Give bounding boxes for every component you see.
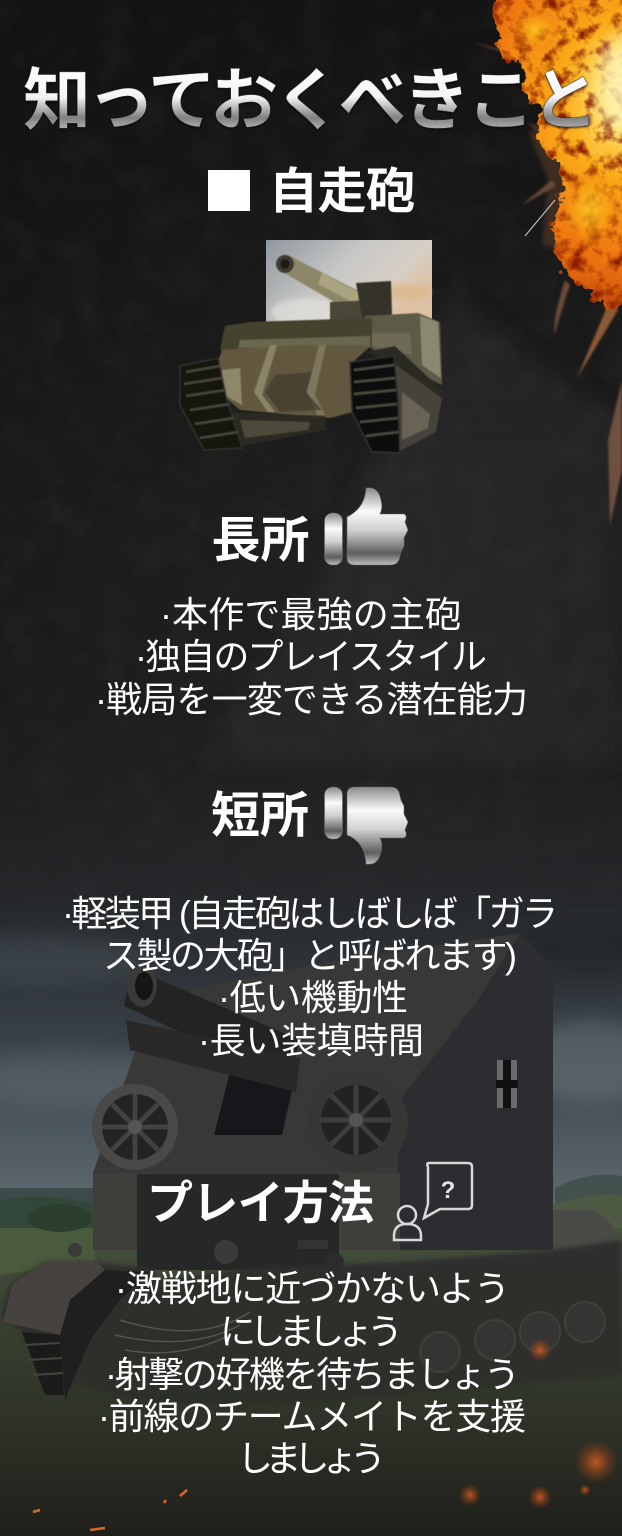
front track [22,1332,64,1395]
gun opening [214,1072,292,1135]
text block: weaknesses list: ·軽装甲 (自走砲はしばしば「ガラ [62,893,558,934]
text block: strengths list: ·独自のプレイスタイル [135,636,487,677]
suspension [392,362,442,452]
title: 知っておくべきこと [23,63,599,139]
section: strengths [212,488,408,568]
gun mount and shield [330,300,372,325]
icon: person with question bubble [394,1163,472,1240]
cross marking [496,1060,518,1108]
recoil cylinder [126,1020,300,1092]
embers and sparks [33,1338,618,1530]
background [0,287,622,1205]
icon: thumbs down [324,787,408,864]
road wheels [420,1302,605,1372]
heading: 短所 [211,789,309,843]
heading: プレイ方法 [147,1177,374,1229]
text block: how to play list: ·前線のチームメイトを支援 [98,1396,526,1437]
text block: weaknesses list [62,893,558,1061]
background tank: large casemate SPG [0,933,622,1405]
gun barrel [279,255,372,318]
text block: weaknesses list: ·長い装填時間 [198,1020,424,1061]
right wheel [308,1072,408,1172]
text block: strengths list: ·本作で最強の主砲 [160,594,461,635]
text block: strengths list [95,594,528,720]
tank image: M7-style SPG [180,240,444,453]
square bullet [208,170,250,211]
heading: self-propelled artillery [208,165,415,219]
headlights [68,1243,82,1257]
dark panel behind heading [137,1174,339,1270]
rear superstructure [365,313,442,385]
gun barrel [124,968,300,1082]
left wheel [92,1084,178,1170]
top deck [220,318,372,350]
left track [180,358,242,450]
front hull [210,345,372,418]
text block: how to play list: しましょう [237,1438,386,1479]
icon: person with question bubble: ? [441,1177,455,1204]
heading: 長所 [212,514,310,568]
section: weaknesses [211,787,408,864]
lower front plate [93,1173,400,1250]
text block: how to play list: ·射撃の好機を待ちましょう [105,1354,520,1395]
text block: weaknesses list: ·低い機動性 [218,977,408,1018]
hull [0,1240,622,1405]
casemate [93,933,553,1250]
icon: thumbs up [324,488,408,565]
text block: how to play list: にしましょう [220,1311,403,1352]
right track [350,356,400,453]
text block: strengths list: ·戦局を一変できる潜在能力 [95,679,528,720]
side face [395,933,553,1250]
heading text: 自走砲 [269,165,415,219]
text block: how to play list: ·激戦地に近づかないよう [115,1268,510,1309]
cable coil [115,1312,250,1353]
distant hills and grass [0,1174,622,1536]
text block: how to play list [98,1268,526,1479]
section: how to play [147,1163,472,1240]
rear gear [553,1210,612,1250]
explosion [470,0,622,525]
mudguard [3,1260,105,1335]
text block: weaknesses list: ス製の大砲」と呼ばれます) [103,935,517,976]
